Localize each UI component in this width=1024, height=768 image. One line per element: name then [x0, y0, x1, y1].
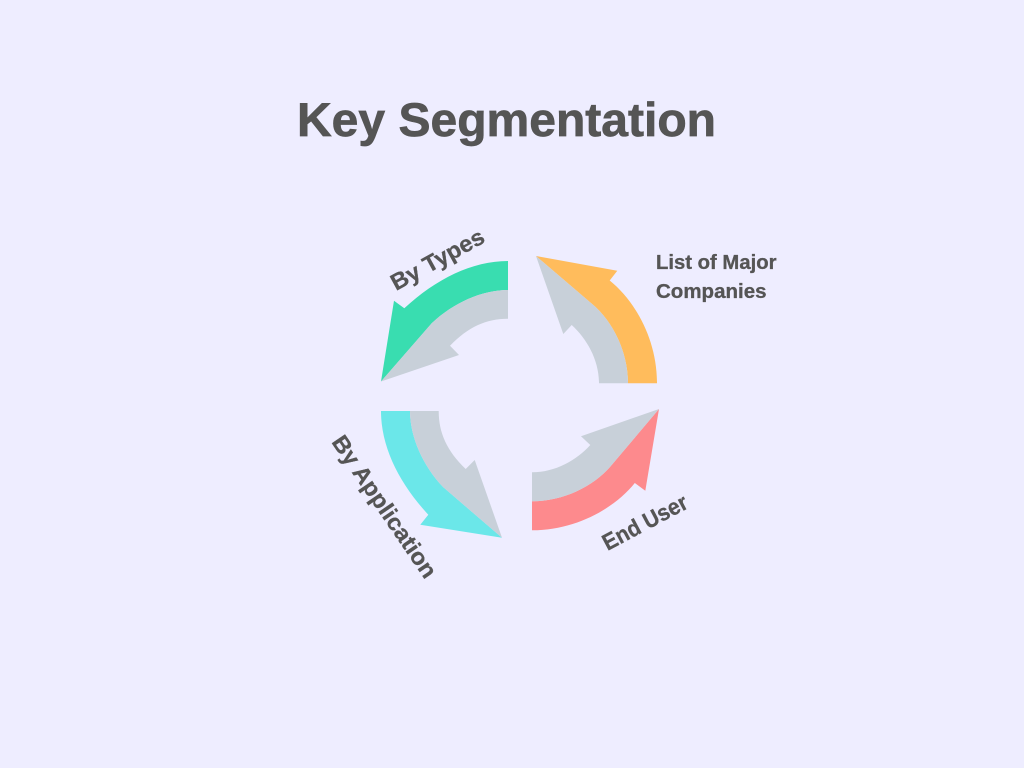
label: By Application: By Application	[327, 430, 442, 583]
arrow: cyan outer	[381, 411, 502, 538]
label: List of Major Companies	[656, 252, 777, 303]
label: End User: End User	[598, 489, 692, 555]
segment: List of Major Companies	[536, 252, 777, 383]
arrow: red outer	[532, 409, 659, 530]
segment: By Application	[327, 411, 502, 583]
arrow: grey inner	[532, 409, 659, 501]
arrow: orange outer	[536, 256, 657, 383]
arrow: grey inner	[536, 256, 628, 383]
arrow: grey inner	[410, 411, 502, 538]
arrow: green outer	[381, 261, 508, 382]
label: List of Major Companies: Companies	[656, 281, 766, 303]
label: List of Major Companies: List of Major	[656, 252, 777, 274]
segment: By Types	[381, 223, 508, 382]
arrow: grey inner	[381, 290, 508, 382]
label: By Types: By Types	[386, 223, 489, 295]
segment: End User	[532, 409, 692, 555]
title: Key Segmentation	[297, 93, 716, 146]
